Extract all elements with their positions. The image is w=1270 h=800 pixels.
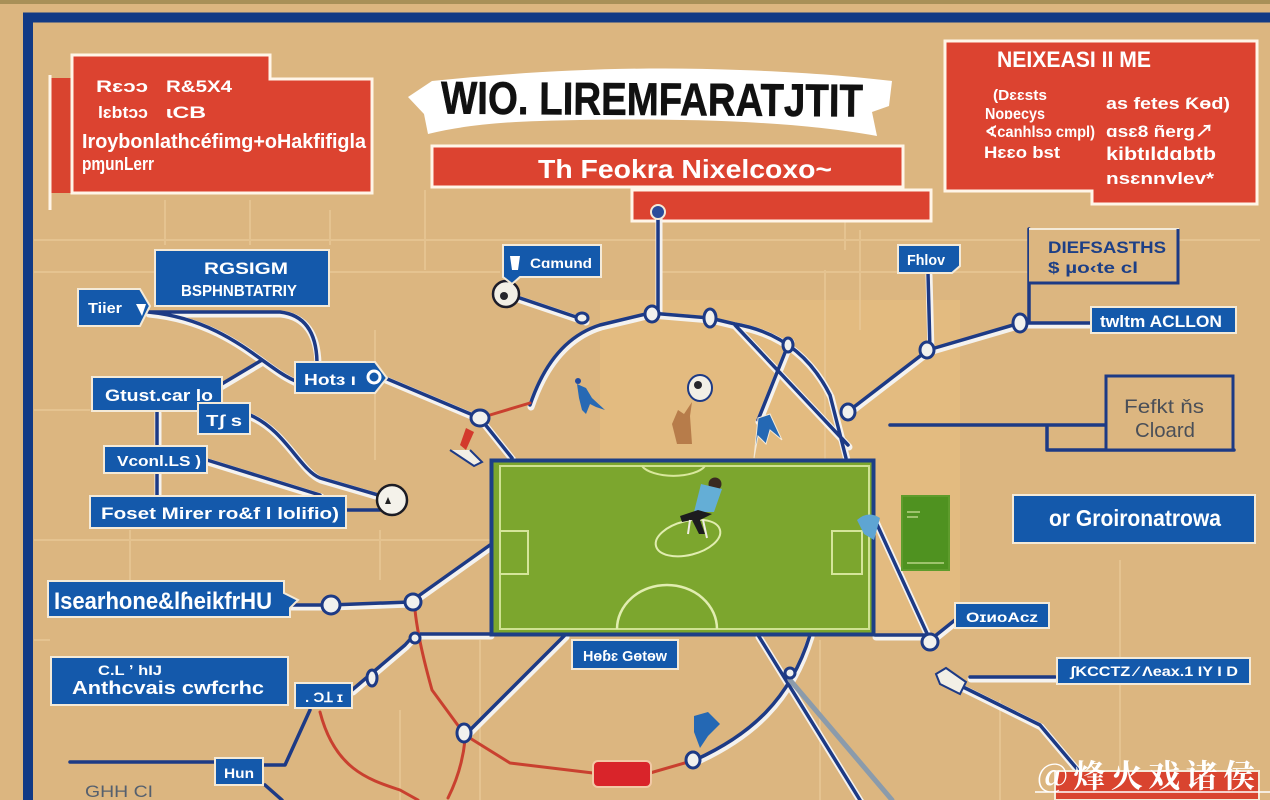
panel: top right red notes: Noɒecys bbox=[985, 106, 1045, 123]
label: Carnund tag: Cɑmund bbox=[530, 255, 592, 271]
icon: brown figure bbox=[672, 402, 692, 444]
label: Carnund tag bbox=[503, 245, 601, 284]
subtitle bar: Th Feokra Nixelcoxo~ bbox=[538, 154, 832, 184]
panel: top left red notes: Iroybonlathcéfimg+oHakfifigla bbox=[82, 131, 367, 153]
label: below pitch box: Hɵɓɛ Gɵtɵw bbox=[583, 648, 667, 665]
panel: top left red notes: Rɛɔɔ bbox=[96, 77, 148, 96]
icon: player on pitch bbox=[680, 478, 722, 538]
label: long blue box bbox=[90, 496, 346, 528]
panel: top left red notes: ɩCB bbox=[166, 103, 206, 122]
red capsule bbox=[593, 761, 651, 787]
label: lower right box: ʃKCCTZ ⁄ Ʌeax.1 IY I D bbox=[1069, 663, 1238, 679]
icon: blue figure bottom bbox=[694, 712, 720, 748]
panel: top right red notes: ɑsɛ8 ñerg↗ bbox=[1106, 122, 1214, 141]
label: lower right box bbox=[1057, 658, 1250, 684]
icon: running blue player bbox=[575, 378, 605, 414]
label: small lower tag: . ƆꞱ ɪ bbox=[305, 689, 343, 705]
nodes bbox=[322, 205, 1027, 768]
label: two line box: C.L ʼ hIJ bbox=[98, 662, 162, 678]
label: record box: BSPHNBTATRIY bbox=[181, 283, 297, 300]
panel: top right red notes: kibtıldɑbtb bbox=[1106, 144, 1216, 164]
label: pentagon tag: Tiier bbox=[88, 300, 122, 317]
label: bottom left tag: Hun bbox=[224, 765, 254, 781]
title banner: WIO. LIREMFARATJTIT bbox=[441, 72, 863, 126]
panel: top right red notes: Hɛɛo bst bbox=[984, 143, 1060, 162]
panel: top right red notes: ∢canhlsɔ cmpl) bbox=[985, 124, 1095, 141]
label: Gtust box: Gtust.car lo bbox=[105, 386, 213, 405]
navy connectors bbox=[70, 212, 1234, 800]
label: Fhlov tag: Fhlov bbox=[907, 252, 946, 269]
label: Vconl box: Vconl.LS ) bbox=[117, 453, 201, 470]
panel: top left red notes: R&5X4 bbox=[166, 77, 233, 96]
label: Vconl box bbox=[104, 446, 207, 473]
label: long blue box: Foset Mirer ro&f l lolifio) bbox=[101, 504, 339, 523]
label: large right blue box: or Groironatrowa bbox=[1049, 505, 1221, 531]
panel: top right red notes: as fetes Ƙɵd) bbox=[1106, 94, 1230, 113]
grey diagonal band bbox=[790, 680, 892, 800]
icon: football top left bbox=[493, 281, 519, 307]
label: outlined info box top right: DIEFSASTHS bbox=[1048, 238, 1166, 257]
subtitle bar bbox=[432, 146, 903, 187]
panel: top left red notes: pɱunLerr bbox=[82, 154, 154, 174]
label: small right box bbox=[955, 603, 1049, 628]
label: Gtust box bbox=[92, 377, 222, 411]
label: outlined board box bbox=[1106, 376, 1233, 450]
red connectors bbox=[320, 403, 695, 800]
icon: football top centre bbox=[688, 375, 712, 401]
label: small right box: OɪᴎoAcz bbox=[966, 609, 1038, 625]
label: small T tag bbox=[198, 403, 250, 434]
label: Hotz tag bbox=[295, 362, 387, 393]
panel: top left red notes: lɛbtɔɔ bbox=[98, 103, 148, 122]
label: Hotz tag: Hotз ı bbox=[304, 372, 356, 389]
panel: top right red notes: NEIXEASI II ME bbox=[997, 47, 1151, 72]
watermark: @烽火戏诸侯 bbox=[1037, 751, 1255, 797]
label: below pitch box bbox=[572, 640, 678, 669]
panel: top right red notes: nsɛnnvlev* bbox=[1106, 169, 1214, 188]
pitch bbox=[492, 460, 874, 634]
panel: top left red notes bbox=[50, 55, 372, 210]
label: record box bbox=[155, 250, 329, 306]
label: record box: RGSIGM bbox=[204, 259, 288, 278]
panel: top right red notes bbox=[945, 41, 1257, 204]
panel: top right red notes: (Dɛɛsts bbox=[993, 87, 1047, 104]
label: pentagon tag bbox=[78, 289, 150, 326]
label: action box bbox=[1091, 307, 1236, 333]
icon: red figure bbox=[450, 428, 482, 466]
connector lines bbox=[70, 212, 1234, 800]
icon: blue pin on pitch edge bbox=[857, 514, 880, 540]
label: bottom left tag bbox=[215, 758, 263, 785]
label: left wide box: Isearhone&lɦeikfrHU bbox=[54, 588, 272, 615]
bottom right red box bbox=[1055, 771, 1259, 800]
label: two line box: Anthcvais cwfcrhc bbox=[72, 678, 264, 698]
label: small T tag: Tʃ s bbox=[206, 413, 242, 430]
label: large right blue box bbox=[1013, 495, 1255, 543]
label: small lower tag bbox=[295, 683, 352, 708]
label: two line box bbox=[51, 657, 288, 705]
white halo of connectors bbox=[149, 214, 1092, 800]
icon: goal post tag bbox=[936, 668, 966, 694]
label: Fhlov tag bbox=[898, 245, 960, 273]
secondary red bar bbox=[632, 190, 931, 221]
label: outlined info box top right bbox=[1029, 229, 1178, 283]
icon: football left bbox=[377, 485, 407, 515]
label: outlined board box: Fefkt ňs bbox=[1124, 397, 1204, 418]
small green goal panel bbox=[902, 496, 949, 570]
label: outlined info box top right: $ µo‹te cl bbox=[1048, 260, 1138, 277]
label: outlined board box: Cloard bbox=[1135, 420, 1195, 442]
label: action box: twltm ACLLON bbox=[1100, 312, 1222, 331]
icon: blue figure by arc bbox=[754, 414, 782, 458]
